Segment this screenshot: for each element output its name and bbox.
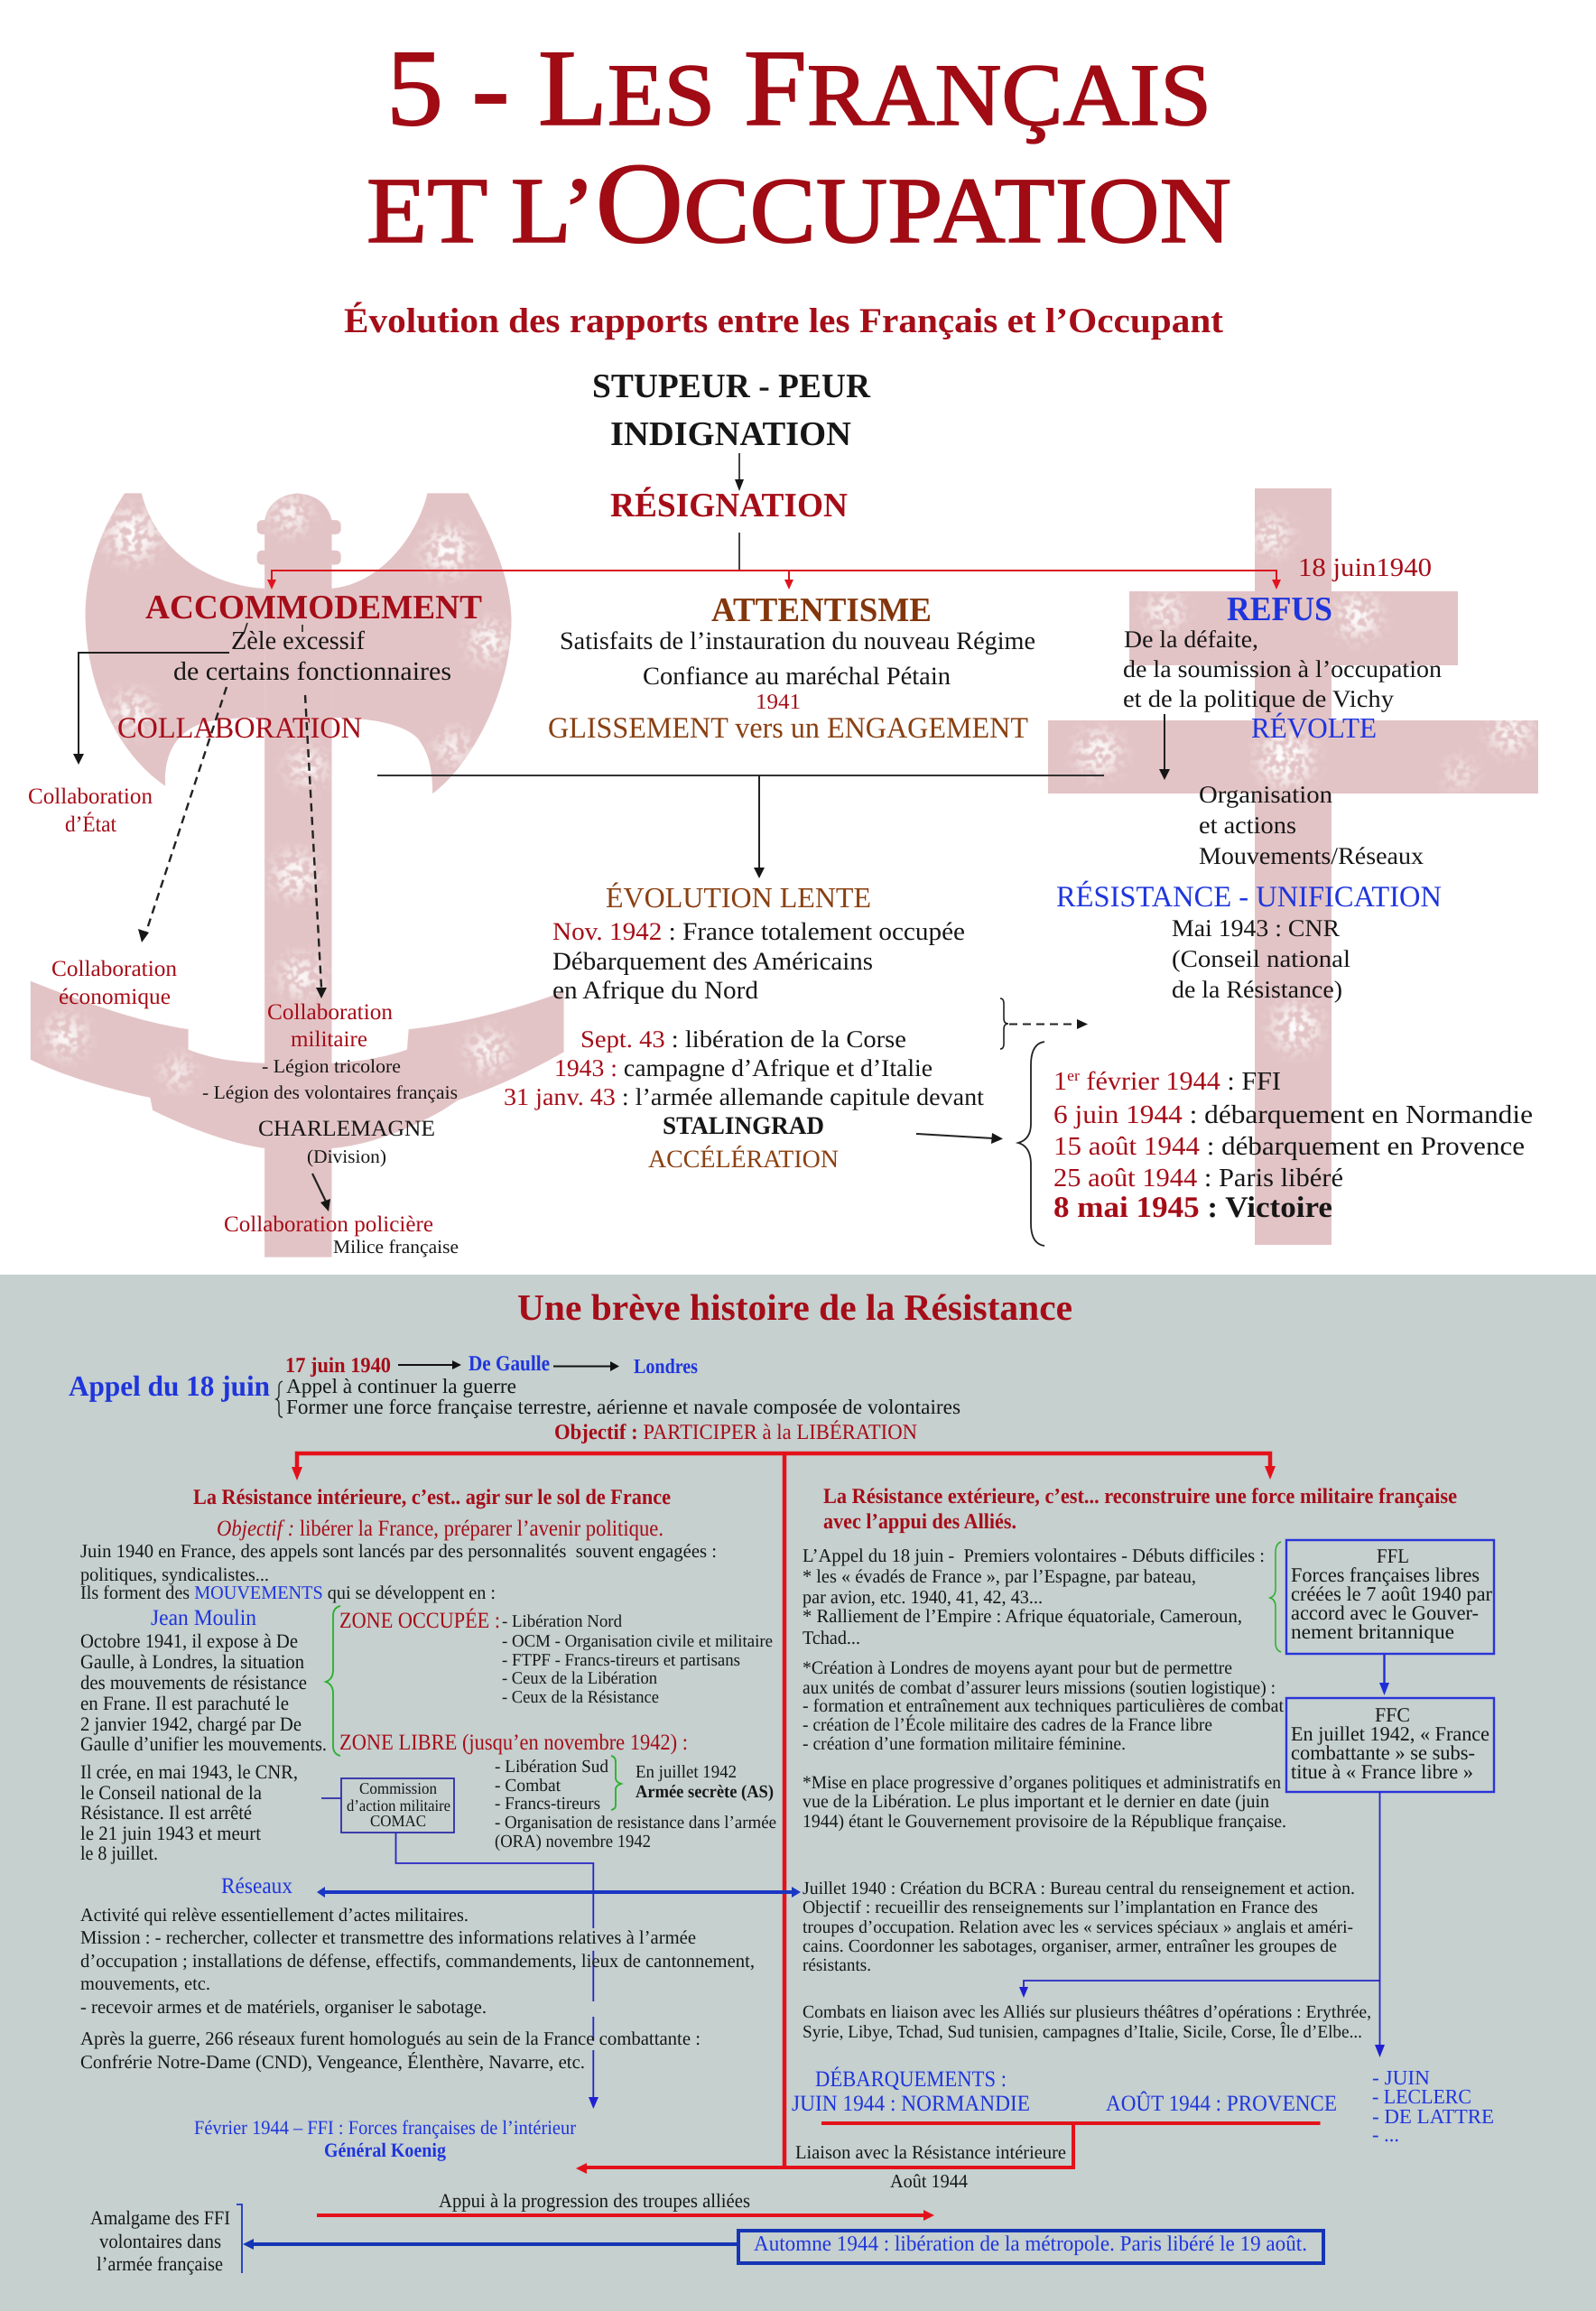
FFL box: créées le 7 août 1940 par xyxy=(1291,1582,1492,1605)
column: attentisme xyxy=(548,591,1035,745)
arrow: FFL to FFC xyxy=(1379,1655,1389,1695)
collaboration arrows xyxy=(73,623,330,1211)
green brace: zones xyxy=(326,1606,340,1756)
FFL box: Forces françaises libres xyxy=(1291,1564,1480,1586)
timeline to victory: février 1944 xyxy=(1080,1067,1220,1096)
column: accommodement xyxy=(117,589,482,745)
free zone list: - Combat xyxy=(495,1776,561,1796)
amalgam label: l’armée française xyxy=(97,2252,223,2275)
réseaux text xyxy=(80,1904,755,2073)
exterior text: logistics xyxy=(803,1658,1284,1754)
movements intro: Ils forment des MOUVEMENTS qui se développent en : xyxy=(80,1582,496,1603)
exterior text: logistics: - formation et entraînement aux techniques particulières de combat xyxy=(803,1696,1284,1716)
panel heading: Une brève histoire de la Résistance xyxy=(517,1286,1072,1328)
column: refus: RÉVOLTE xyxy=(1251,711,1377,744)
slow evolution block: Débarquement des Américains xyxy=(552,948,873,976)
amalgam label: volontaires dans xyxy=(99,2230,221,2252)
column: accommodement: ACCOMMODEMENT xyxy=(145,589,482,626)
BCRA text xyxy=(803,1879,1355,1975)
landings: JUIN 1944 : NORMANDIE xyxy=(792,2092,1030,2116)
column: refus: REFUS xyxy=(1227,590,1332,628)
combats text xyxy=(803,2002,1371,2042)
timeline to victory: 15 août 1944 : débarquement en Provence xyxy=(1053,1132,1525,1161)
FFI label: Général Koenig xyxy=(324,2139,446,2161)
horizontal link and arrow to slow evolution xyxy=(377,775,1104,878)
free zone list xyxy=(339,1731,776,1852)
free zone list: En juillet 1942 xyxy=(636,1762,737,1782)
background emblem: cross of Lorraine xyxy=(1048,488,1538,1245)
column: attentisme: Confiance au maréchal Pétain xyxy=(643,663,951,691)
amalgam label: Amalgame des FFI xyxy=(90,2206,230,2229)
BCRA text: troupes d’occupation. Relation avec les « services spéciaux » anglais et améri- xyxy=(803,1917,1353,1937)
occupied zone list: - FTPF - Francs-tireurs et partisans xyxy=(502,1651,740,1670)
Jean Moulin text: Résistance. Il est arrêté xyxy=(80,1801,252,1824)
column: refus: RÉSISTANCE - UNIFICATION xyxy=(1056,880,1442,914)
COMAC box xyxy=(321,1778,454,1833)
occupied zone list xyxy=(339,1608,773,1707)
slow evolution block: Nov. 1942 : France totalement occupée xyxy=(552,918,965,946)
free zone list: (ORA) novembre 1942 xyxy=(495,1832,651,1852)
column: attentisme: ATTENTISME xyxy=(711,591,932,629)
exterior text: logistics: aux unités de combat d’assurer leurs missions (soutien logistique) : xyxy=(803,1678,1276,1698)
Jean Moulin text: Il crée, en mai 1943, le CNR, xyxy=(80,1760,298,1783)
exterior text: logistics: *Création à Londres de moyens ayant pour but de permettre xyxy=(803,1658,1232,1678)
Jean Moulin text xyxy=(80,1606,327,1864)
slow evolution block: en Afrique du Nord xyxy=(552,977,758,1005)
FFL box xyxy=(1286,1540,1494,1654)
Jean Moulin text: en Frane. Il est parachuté le xyxy=(80,1692,289,1714)
collaboration types: économique xyxy=(59,985,171,1009)
exterior text: volunteers: L’Appel du 18 juin - Premiers volontaires - Débuts difficiles : xyxy=(803,1545,1265,1566)
movements intro: politiques, syndicalistes... xyxy=(80,1564,269,1585)
Jean Moulin text: Octobre 1941, il expose à De xyxy=(80,1629,298,1652)
title: 5 - LES FRANÇAIS xyxy=(386,28,1211,149)
interior resistance heading: Objectif : libérer la France, préparer l’avenir politique. xyxy=(217,1517,663,1541)
title: ET L’OCCUPATION xyxy=(367,139,1231,267)
column: attentisme: Satisfaits de l’instauration du nouveau Régime xyxy=(560,627,1035,655)
column: refus: Mouvements/Réseaux xyxy=(1199,842,1424,869)
free zone list: - Organisation de resistance dans l’armée xyxy=(495,1813,776,1833)
red branching arrows xyxy=(267,571,1281,589)
blue arrows from FFC xyxy=(1019,1792,1385,2057)
brackets and arrows to timeline xyxy=(916,998,1088,1246)
FFI label: Février 1944 – FFI : Forces françaises de l’intérieur xyxy=(194,2116,577,2139)
Jean Moulin text: Gaulle d’unifier les mouvements. xyxy=(80,1732,327,1755)
appeal of 18 June: Former une force française terrestre, aérienne et navale composée de volontaires xyxy=(286,1396,960,1418)
collaboration types: CHARLEMAGNE xyxy=(258,1117,435,1141)
appeal of 18 June: Objectif : PARTICIPER à la LIBÉRATION xyxy=(554,1420,917,1444)
timeline to victory: 25 août 1944 : Paris libéré xyxy=(1053,1164,1343,1193)
slow evolution block: STALINGRAD xyxy=(663,1112,824,1140)
column: refus: de la soumission à l’occupation xyxy=(1123,655,1443,682)
appeal of 18 June: De Gaulle xyxy=(469,1352,550,1376)
slow evolution block: ACCÉLÉRATION xyxy=(648,1145,839,1174)
flow head: stupeur, indignation, résignation: RÉSIGNATION xyxy=(610,487,848,524)
column: refus xyxy=(1056,553,1443,1003)
liaison text: Août 1944 xyxy=(890,2170,968,2192)
collaboration types: - Légion tricolore xyxy=(262,1055,401,1077)
flow head: stupeur, indignation, résignation: INDIGNATION xyxy=(610,415,851,453)
generals list: - LECLERC xyxy=(1372,2085,1471,2108)
generals list xyxy=(1372,2066,1494,2146)
Jean Moulin text: le 8 juillet. xyxy=(80,1842,158,1864)
amalgam label xyxy=(90,2204,242,2275)
panel: brève histoire de la Résistance xyxy=(0,1275,1596,2311)
réseaux text: Mission : - rechercher, collecter et transmettre des informations relatives à l’armée xyxy=(80,1926,696,1948)
combats text: Combats en liaison avec les Alliés sur plusieurs théâtres d’opérations : Erythrée, xyxy=(803,2002,1371,2022)
collaboration types: Milice française xyxy=(333,1236,459,1258)
support arrow: Appui à la progression des troupes alliées xyxy=(439,2189,750,2212)
FFL box: FFL xyxy=(1377,1545,1409,1567)
BCRA text: Juillet 1940 : Création du BCRA : Bureau central du renseignement et action. xyxy=(803,1879,1355,1898)
liaison text xyxy=(795,2141,1066,2192)
Jean Moulin text: 2 janvier 1942, chargé par De xyxy=(80,1712,302,1735)
occupied zone list: - Libération Nord xyxy=(502,1612,622,1631)
subtitle: Évolution des rapports entre les Français et l’Occupant xyxy=(344,302,1223,340)
exterior text: volunteers: par avion, etc. 1940, 41, 42, 43... xyxy=(803,1586,1043,1608)
appeal of 18 June: 17 juin 1940 xyxy=(285,1354,391,1378)
timeline to victory: 1 xyxy=(1053,1067,1220,1096)
exterior text: volunteers: Tchad... xyxy=(803,1627,860,1648)
liaison text: Liaison avec la Résistance intérieure xyxy=(795,2141,1066,2163)
exterior text: volunteers: * les « évadés de France », par l’Espagne, par bateau, xyxy=(803,1565,1196,1587)
exterior text: political organs: 1944) étant le Gouvernement provisoire de la République française. xyxy=(803,1812,1286,1832)
collaboration types xyxy=(28,784,459,1258)
green brace: FFL xyxy=(1270,1542,1281,1652)
column: refus: et de la politique de Vichy xyxy=(1123,685,1395,712)
timeline to victory: : FFI xyxy=(1227,1067,1278,1096)
flow head: stupeur, indignation, résignation xyxy=(592,367,871,571)
collaboration types: Collaboration xyxy=(267,1000,393,1025)
FFC box: combattante » se subs- xyxy=(1291,1741,1475,1764)
FFL box: nement britannique xyxy=(1291,1620,1454,1643)
column: accommodement: Zèle excessif xyxy=(231,626,365,655)
timeline to victory: 6 juin 1944 : débarquement en Normandie xyxy=(1053,1100,1533,1129)
background emblem: francisque axe xyxy=(31,493,564,1258)
exterior text: political organs: vue de la Libération. Le plus important et le dernier en date (juin xyxy=(803,1792,1269,1812)
FFC box xyxy=(1286,1698,1494,1792)
réseaux text: Activité qui relève essentiellement d’actes militaires. xyxy=(80,1904,469,1926)
column: refus: Organisation xyxy=(1199,781,1333,808)
BCRA text: Objectif : recueillir des renseignements sur l’implantation en France des xyxy=(803,1898,1318,1917)
slow evolution block: Sept. 43 : libération de la Corse xyxy=(580,1026,906,1053)
generals list: - DE LATTRE xyxy=(1372,2105,1494,2128)
réseaux heading and double arrow xyxy=(221,1874,801,1898)
interior resistance heading xyxy=(193,1486,671,1541)
Jean Moulin text: Gaulle, à Londres, la situation xyxy=(80,1650,304,1673)
support arrow xyxy=(317,2189,934,2221)
movements intro xyxy=(80,1540,717,1603)
red liaison lines and arrow xyxy=(576,2123,1320,2174)
timeline to victory: 8 mai 1945 : Victoire xyxy=(1053,1192,1332,1224)
generals list: - ... xyxy=(1372,2123,1399,2146)
occupied zone list: - Ceux de la Libération xyxy=(502,1669,657,1688)
Jean Moulin text: des mouvements de résistance xyxy=(80,1671,307,1694)
arrow: COMAC to FFI xyxy=(395,1833,598,2109)
exterior resistance heading: avec l’appui des Alliés. xyxy=(823,1510,1016,1534)
FFI label xyxy=(194,2116,577,2161)
column: accommodement: de certains fonctionnaires xyxy=(173,657,451,686)
FFC box: FFC xyxy=(1375,1703,1410,1726)
collaboration types: (Division) xyxy=(307,1146,386,1167)
COMAC box: d’action militaire xyxy=(347,1796,450,1814)
appeal of 18 June xyxy=(69,1352,960,1444)
exterior resistance heading xyxy=(823,1485,1457,1534)
combats text: Syrie, Libye, Tchad, Sud tunisien, campagnes d’Italie, Sicile, Corse, Île d’Elbe... xyxy=(803,2021,1362,2042)
exterior text: political organs xyxy=(803,1773,1286,1832)
liberation arrow and box: Automne 1944 : libération de la métropole. Paris libéré le 19 août. xyxy=(754,2232,1307,2256)
exterior text: volunteers: * Ralliement de l’Empire : Afrique équatoriale, Cameroun, xyxy=(803,1605,1242,1627)
free zone list: Armée secrète (AS) xyxy=(636,1782,774,1802)
free zone list: - Francs-tireurs xyxy=(495,1794,600,1814)
réseaux text: mouvements, etc. xyxy=(80,1972,210,1994)
Jean Moulin text: le Conseil national de la xyxy=(80,1781,262,1804)
exterior text: political organs: *Mise en place progressive d’organes politiques et administratifs en xyxy=(803,1773,1281,1793)
collaboration types: Collaboration xyxy=(51,957,177,981)
BCRA text: résistants. xyxy=(803,1955,871,1975)
slow evolution block xyxy=(504,881,985,1174)
liberation arrow and box xyxy=(243,2231,1323,2263)
collaboration types: Collaboration policière xyxy=(224,1212,433,1237)
appeal of 18 June: Londres xyxy=(634,1355,698,1378)
timeline to victory xyxy=(1053,1067,1533,1224)
free zone list: ZONE LIBRE (jusqu’en novembre 1942) : xyxy=(339,1731,688,1755)
column: refus: (Conseil national xyxy=(1172,945,1350,972)
column: refus: de la Résistance) xyxy=(1172,976,1342,1003)
exterior text: logistics: - création de l’École militaire des cadres de la France libre xyxy=(803,1714,1212,1735)
column: refus: De la défaite, xyxy=(1124,626,1258,653)
column: refus: 18 juin1940 xyxy=(1298,553,1432,582)
réseaux text: - recevoir armes et de matériels, organiser le sabotage. xyxy=(80,1996,487,2018)
collaboration types: Collaboration xyxy=(28,784,153,809)
FFC box: En juillet 1942, « France xyxy=(1291,1722,1489,1745)
slow evolution block: 1943 : campagne d’Afrique et d’Italie xyxy=(554,1054,933,1081)
réseaux text: d’occupation ; installations de défense, effectifs, commandements, lieux de cantonnement, xyxy=(80,1950,755,1972)
occupied zone list: - Ceux de la Résistance xyxy=(502,1688,659,1707)
exterior resistance heading: La Résistance extérieure, c’est... reconstruire une force militaire française xyxy=(823,1485,1457,1508)
collaboration types: militaire xyxy=(291,1027,367,1052)
red main split with vertical axis xyxy=(292,1453,1276,2168)
generals list: - JUIN xyxy=(1372,2066,1430,2089)
réseaux heading and double arrow: Réseaux xyxy=(221,1874,292,1898)
occupied zone list: - OCM - Organisation civile et militaire xyxy=(502,1632,773,1651)
landings xyxy=(792,2066,1337,2116)
FFL box: accord avec le Gouver- xyxy=(1291,1601,1479,1624)
COMAC box: COMAC xyxy=(370,1812,426,1830)
exterior text: volunteers xyxy=(803,1545,1265,1648)
collaboration types: d’État xyxy=(65,812,116,837)
BCRA text: cains. Coordonner les sabotages, organiser, armer, entraîner les groupes de xyxy=(803,1936,1337,1956)
flow head: stupeur, indignation, résignation: STUPEUR - PEUR xyxy=(592,367,871,405)
column: attentisme: GLISSEMENT vers un ENGAGEMENT xyxy=(548,712,1028,745)
movements intro: Juin 1940 en France, des appels sont lancés par des personnalités souvent engagées : xyxy=(80,1540,717,1562)
column: attentisme: 1941 xyxy=(756,691,801,714)
COMAC box: Commission xyxy=(359,1779,437,1797)
free zone list: - Libération Sud xyxy=(495,1757,608,1777)
collaboration types: - Légion des volontaires français xyxy=(202,1081,458,1103)
exterior text: logistics: - création d’une formation militaire féminine. xyxy=(803,1734,1126,1754)
Jean Moulin text: le 21 juin 1943 et meurt xyxy=(80,1822,261,1844)
interior resistance heading: La Résistance intérieure, c’est.. agir sur le sol de France xyxy=(193,1486,671,1509)
FFC box: titue à « France libre » xyxy=(1291,1760,1473,1783)
slow evolution block: ÉVOLUTION LENTE xyxy=(606,881,871,914)
Jean Moulin text: Jean Moulin xyxy=(151,1606,256,1630)
landings: DÉBARQUEMENTS : xyxy=(815,2066,1007,2092)
column: refus: et actions xyxy=(1199,812,1296,839)
landings: AOÛT 1944 : PROVENCE xyxy=(1106,2091,1337,2116)
réseaux text: Après la guerre, 266 réseaux furent homologués au sein de la France combattante : xyxy=(80,2028,701,2049)
réseaux text: Confrérie Notre-Dame (CND), Vengeance, Élenthère, Navarre, etc. xyxy=(80,2051,585,2073)
occupied zone list: ZONE OCCUPÉE : xyxy=(339,1608,500,1633)
appeal of 18 June: Appel à continuer la guerre xyxy=(286,1375,516,1397)
column: accommodement: COLLABORATION xyxy=(117,712,362,745)
column: refus: Mai 1943 : CNR xyxy=(1172,914,1340,942)
appeal of 18 June: Appel du 18 juin xyxy=(69,1369,270,1402)
timeline to victory: er xyxy=(1067,1067,1080,1084)
slow evolution block: 31 janv. 43 : l’armée allemande capitule devant xyxy=(504,1083,985,1110)
title xyxy=(367,28,1231,267)
